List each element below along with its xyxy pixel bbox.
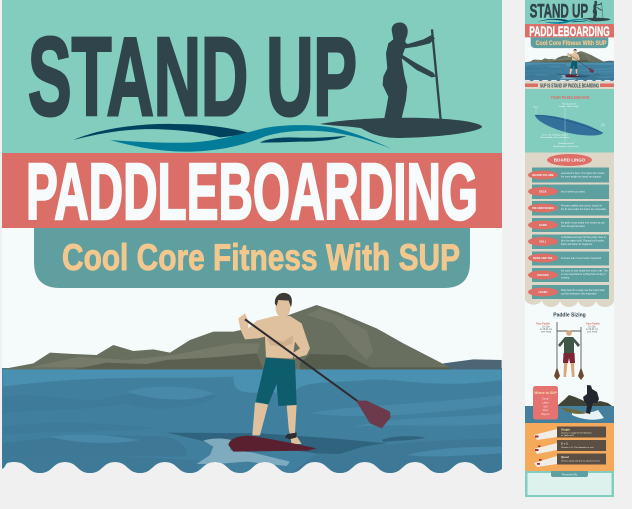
term labels: GLIDE: [539, 223, 547, 227]
fins: [535, 436, 542, 465]
heading: YOUR PADDLEBOARD: [550, 95, 590, 100]
shorts: [256, 358, 297, 406]
ankle leash: [285, 433, 297, 439]
term labels: LEASH: [539, 290, 548, 294]
term definitions: the glide of your board is its motion as you: [561, 222, 605, 224]
panel: enlarged hero: [2, 0, 502, 478]
callout text: Tail: [601, 124, 605, 126]
side labels: Race Paddle: [536, 324, 551, 326]
term definitions: the more weight the board can support.: [561, 176, 602, 178]
term definitions: Wrap from fin to strap, ties the board when: [561, 289, 606, 292]
term labels: ROCKER: [537, 273, 549, 277]
term labels: NOSE AND TAIL: [533, 256, 553, 260]
paddle blade: [356, 401, 391, 428]
where to SUP box: Where to SUP: [534, 391, 557, 395]
logo: paddler silhouette and waves: [73, 23, 482, 152]
wake: [572, 410, 604, 420]
paddle shaft: [245, 319, 358, 402]
panel: board lingo: BOARD LINGO: [554, 158, 586, 162]
band: SUP is stand up paddle boarding: SUP IS STAND UP PADDLE BOARDING: [540, 84, 599, 90]
callout text: Deck: the standing surface: [542, 134, 569, 136]
fin text: Choose a single fin for flatwater: [561, 432, 592, 434]
fin text: Choose a 2+1 for flatwater or surf: [561, 446, 594, 449]
thumbnail base: [525, 0, 614, 497]
scene: paddler on the water: [2, 293, 502, 478]
callout text: Standup board: [562, 102, 577, 106]
mountain: [2, 305, 450, 369]
term definitions: you fall overboard. Very important!: [561, 292, 597, 296]
fin text: Single: [561, 428, 570, 432]
term definitions: is more important for surfing than touring or: [561, 273, 606, 276]
board diagram: [535, 115, 603, 136]
side labels: 10-12in: [542, 326, 551, 328]
beige scalloped background: [525, 152, 614, 307]
where to SUP box: Bayous: [542, 413, 550, 416]
side labels: or 26-31 cm: [586, 328, 598, 331]
term definitions: this is where you stand.: [561, 190, 586, 194]
water reflections: [197, 439, 290, 466]
chest shading: [267, 335, 293, 347]
panel: fin setups: [525, 423, 614, 471]
sea: [2, 368, 502, 478]
fin cards: [557, 426, 606, 464]
term pills: [528, 170, 558, 296]
fin text: Choose quad and pro for advanced surf: [561, 460, 600, 462]
surfer board: [561, 408, 587, 414]
surfer in suit: [583, 385, 599, 414]
term cards: [532, 168, 609, 299]
panel: presented by footer: Presented By: [562, 472, 578, 476]
board: [228, 436, 317, 452]
board shadow: [167, 433, 387, 454]
term labels: BOARD VOLUME: [532, 173, 554, 177]
panel: where to SUP: [525, 385, 614, 424]
fin text: 2 + 1: [561, 442, 568, 446]
heading pill: [547, 154, 592, 166]
subtitle tab: [34, 228, 470, 288]
term definitions: flatter and better for beginners.: [561, 243, 593, 246]
term definitions: Provides stability and control; located in: [561, 204, 603, 208]
thumbnail: hero: Cool Core Fitness With SUP: [536, 40, 607, 47]
band: SUP is stand up paddle boarding: [525, 81, 614, 90]
term definitions: A displacement-type hull has pointy nose to: [561, 236, 606, 239]
side labels: or 26-31 cm: [540, 328, 552, 331]
subtitle tab: Cool Core Fitness With SUP: [62, 237, 460, 278]
term definitions: slice the water (surf). Planing hull is wider,: [561, 240, 605, 242]
where to SUP box: Surf: [543, 406, 548, 408]
side labels: over head: [587, 330, 598, 334]
panel: paddle sizing: [536, 312, 601, 380]
term labels: FIN AND FIN BOX: [532, 206, 554, 210]
title: STAND UP: STAND UP: [28, 15, 357, 139]
header mint background: [2, 0, 502, 154]
callout text: Board bottom and fin area: [553, 145, 579, 148]
where to SUP box: [533, 386, 558, 420]
term definitions: front and rear of your board. Important!: [561, 257, 601, 260]
side labels: [536, 324, 601, 334]
blade shadow: [382, 436, 426, 442]
head: [276, 297, 290, 318]
water: [525, 406, 614, 424]
callout text: Board width, deck and bottom: [541, 136, 570, 139]
fin text: or "glide well": [561, 434, 574, 437]
torso and arms: [238, 313, 310, 359]
panel: presented by footer: [525, 471, 614, 497]
callout text: Nose: [533, 106, 539, 108]
callout text: length, width, height: [559, 105, 579, 108]
paddles: [554, 322, 584, 380]
where to SUP box: Ocean: [542, 398, 550, 400]
heading: Paddle Sizing: [553, 312, 586, 318]
hills: [557, 395, 612, 406]
legs: [252, 403, 302, 444]
thumbnail: hero: STAND UP: [530, 0, 588, 22]
distant hill: [443, 359, 502, 369]
term labels: HULL: [540, 240, 547, 244]
thumbnail: hero: [525, 0, 614, 82]
light sky background: [2, 228, 502, 370]
side labels: 10-12in: [588, 326, 597, 328]
term labels: DECK: [539, 190, 547, 194]
callout lines: [536, 108, 605, 145]
term definitions: expressed in liters. The higher the number: [561, 172, 605, 175]
side labels: Race Paddle: [586, 324, 601, 326]
where to SUP box: River: [543, 409, 548, 412]
term definitions: the curve of your board from nose to tail. This: [561, 270, 609, 272]
callout text: Rocker and hull: [558, 142, 574, 145]
where to SUP box: Lakes: [542, 402, 549, 404]
boards with fins: [534, 429, 557, 467]
term definitions: [561, 172, 609, 296]
term definitions: cruising.: [561, 276, 570, 280]
fin text: Quad: [561, 455, 569, 459]
term definitions: drive through flat water.: [561, 225, 586, 228]
side labels: over head: [541, 330, 552, 334]
callout text: [533, 102, 605, 148]
hair: [275, 293, 292, 307]
term labels: [532, 173, 554, 294]
sea streaks: [3, 369, 502, 477]
fin text: [561, 428, 600, 462]
panel: board lingo: [525, 151, 614, 307]
term definitions: the fin area under the board, are removable.: [561, 208, 607, 211]
paddler figure: [558, 330, 580, 377]
panel: full infographic thumbnail: [525, 0, 614, 497]
panel: your paddleboard: [525, 89, 614, 152]
